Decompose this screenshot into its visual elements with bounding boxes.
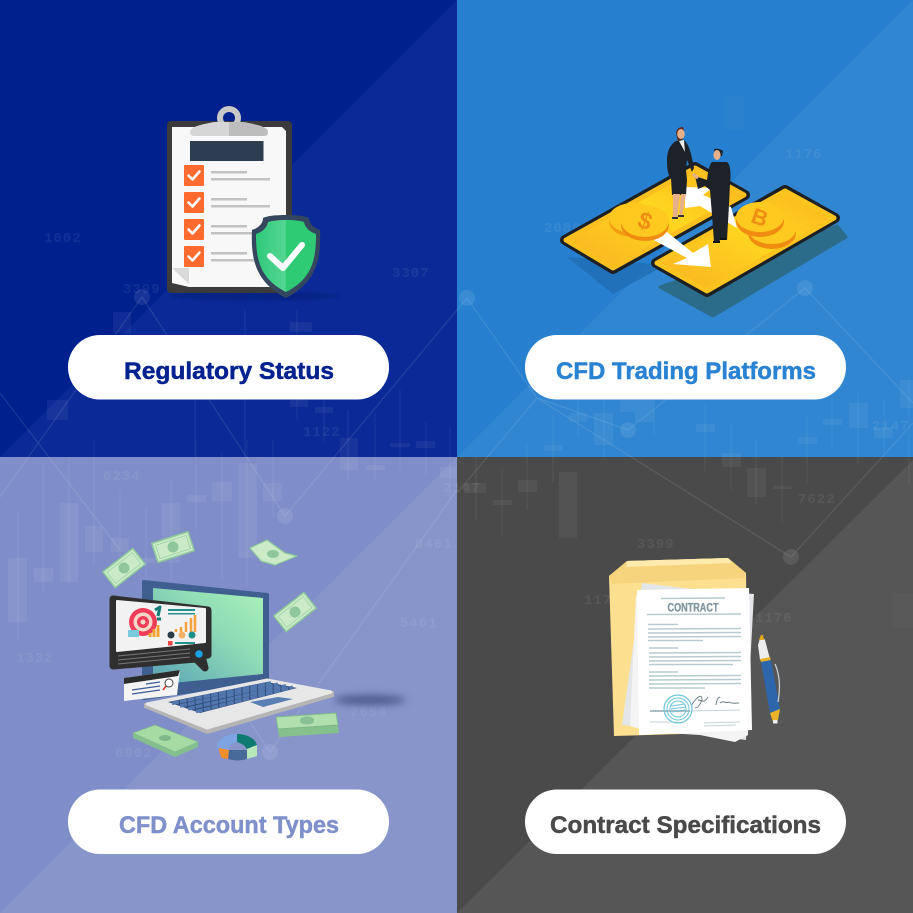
bitcoin coins (736, 202, 796, 249)
clipboard paper (172, 127, 286, 287)
browser search card (124, 670, 180, 701)
panel: CFD trading platforms background (457, 0, 913, 457)
background trading chart: 2147 (443, 481, 481, 497)
label: CFD Account Types (68, 790, 389, 854)
background trading chart: 2080 (544, 221, 582, 237)
clipboard board (167, 121, 292, 293)
icon: laptop with banknotes and charts (103, 532, 406, 760)
clipboard clip (190, 109, 268, 136)
signature lines (650, 710, 740, 726)
dollar coins: $ (634, 206, 656, 237)
bitcoin coins: B (748, 203, 772, 232)
woman figure (667, 127, 694, 219)
chat bubble with dashboard (113, 599, 208, 668)
background trading chart: 2147 (872, 419, 910, 435)
laptop base (145, 680, 333, 733)
left phone (565, 167, 745, 269)
background trading chart: 6902 (115, 746, 153, 762)
label: Regulatory Status: Regulatory Status (124, 358, 334, 385)
man figure (693, 149, 731, 243)
label: Contract Specifications (525, 790, 846, 854)
checklist rows (184, 165, 270, 267)
background trading chart: 1332 (16, 651, 54, 667)
label: CFD Trading Platforms: CFD Trading Platforms (556, 358, 816, 385)
envelope (609, 558, 748, 736)
background trading chart: 5461 (400, 616, 438, 632)
icon: phones with handshake and coins (565, 127, 846, 316)
background trading chart: 1176 (785, 147, 823, 163)
phone shadows (567, 226, 846, 316)
background trading chart: 0461 (415, 537, 453, 553)
background trading chart: 7622 (798, 492, 836, 508)
background trading chart (0, 96, 913, 762)
icon: green shield (252, 215, 320, 298)
banknote stack left (133, 725, 198, 757)
panel: regulatory status background (0, 0, 457, 457)
panel: CFD account types background (0, 457, 457, 913)
right phone (656, 190, 835, 292)
icon: ballpoint pen (758, 635, 780, 724)
dollar coins (609, 203, 669, 241)
background trading chart: 3399 (637, 537, 675, 553)
background trading chart: 1176 (755, 611, 793, 627)
clipboard header bar (190, 141, 264, 161)
signatures (691, 696, 739, 708)
background trading chart: 117 (584, 593, 612, 609)
icon: contract, envelope and pen (609, 558, 780, 742)
label: CFD Trading Platforms (525, 335, 846, 400)
clipboard shadow (170, 292, 340, 300)
contract text lines (647, 598, 741, 688)
3D donut chart (217, 734, 257, 760)
background trading chart: 1002 (44, 231, 82, 247)
label: Contract Specifications: Contract Specifications (550, 812, 821, 839)
banknote stack right (276, 713, 339, 737)
label: CFD Account Types: CFD Account Types (119, 812, 339, 839)
folded paper corner (172, 268, 189, 284)
blue seal (664, 695, 692, 723)
background trading chart: 3399 (123, 282, 161, 298)
icon: clipboard with checklist and shield (167, 109, 340, 300)
background trading chart: 7654 (350, 705, 388, 721)
laptop lid (144, 582, 267, 698)
label: Regulatory Status (68, 335, 389, 400)
white exchange arrows (650, 187, 737, 267)
back sheets (622, 583, 754, 742)
background trading chart: 1122 (303, 425, 341, 441)
keyboard (168, 682, 297, 713)
floating banknotes (103, 532, 316, 632)
laptop shadow (334, 695, 406, 705)
panel: contract specifications background (457, 457, 913, 913)
contract title: CONTRACT (668, 602, 718, 614)
laptop screen (153, 588, 263, 685)
background trading chart: 0234 (103, 469, 141, 485)
contract main sheet (637, 588, 752, 735)
background trading chart: 3307 (392, 266, 430, 282)
